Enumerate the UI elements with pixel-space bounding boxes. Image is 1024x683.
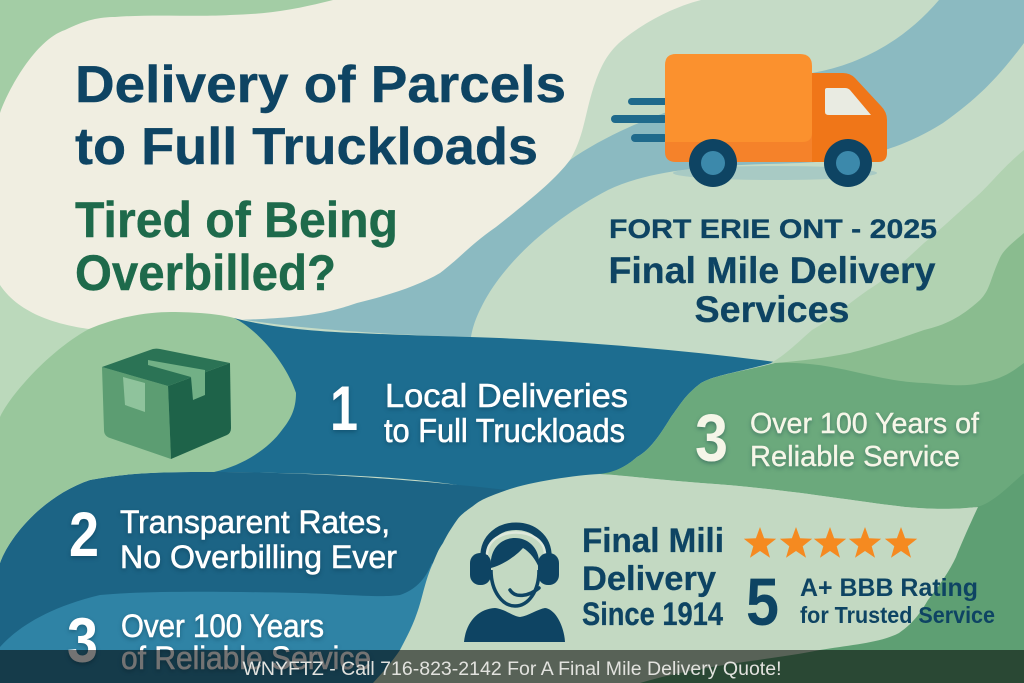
icon: five star rating (744, 527, 917, 558)
agent shoulders (464, 608, 565, 642)
final mile text: Since 1914 (582, 596, 723, 632)
background wave: green item blob (596, 363, 1024, 509)
item 2 (69, 500, 397, 575)
item 1: to Full Truckloads (384, 412, 625, 449)
subtitle: Overbilled? (75, 245, 336, 301)
final mile text: Delivery (582, 560, 716, 598)
background wave: support panel (373, 474, 978, 683)
title: to Full Truckloads (75, 118, 538, 176)
item 2: Transparent Rates, (120, 504, 390, 540)
box left face (102, 367, 171, 459)
item 1: Local Deliveries (385, 377, 628, 414)
background wave: teal band two (0, 472, 520, 683)
final mile text (582, 522, 724, 632)
item 1 (330, 374, 628, 449)
truck cab (800, 73, 887, 162)
final mile text: Final Mili (582, 522, 724, 560)
item 1: 1 (330, 374, 358, 444)
item 3 right (695, 401, 980, 476)
background wave: right pale green layer (771, 150, 1024, 363)
icon: support agent with headset (464, 526, 565, 642)
background wave: cream headline area (0, 0, 701, 329)
background wave: teal band one (214, 318, 775, 500)
headset highlight (487, 532, 545, 555)
box tape front (123, 377, 145, 412)
rating text: A+ BBB Rating (800, 574, 978, 602)
truck cargo box (665, 54, 812, 142)
rating text: for Trusted Service (800, 602, 995, 628)
title: Delivery of Parcels (75, 56, 566, 114)
ground shadow (673, 166, 877, 180)
background wave: top left green (0, 0, 340, 130)
truck window (825, 88, 871, 115)
microphone boom (510, 588, 539, 595)
item 3 right: Over 100 Years of (750, 408, 980, 440)
icon: delivery truck (611, 54, 887, 187)
background wave: bottom right dark green (500, 473, 1024, 683)
item 3 left: 3 (67, 606, 98, 676)
ear cups (470, 553, 491, 585)
speed lines (611, 98, 668, 142)
footer bar (0, 650, 1024, 683)
item 3 right: Reliable Service (750, 441, 960, 473)
background wave: teal band three (0, 563, 470, 683)
box right face (168, 363, 231, 459)
heading: final mile delivery services (608, 250, 936, 330)
rating number: 5 (746, 565, 779, 640)
item 2: No Overbilling Ever (120, 539, 397, 575)
item 3 left (67, 606, 371, 676)
title (75, 56, 566, 176)
background wave: left green bubble (0, 312, 296, 563)
background wave: left pale green (0, 250, 120, 450)
face outline (491, 570, 539, 606)
background wave: right mid green layer (775, 233, 1024, 400)
rating text (800, 574, 995, 628)
truck lower body (665, 130, 812, 162)
background wave: upper right blue band (234, 0, 1024, 337)
truck wheels (689, 139, 872, 187)
item 3 right: 3 (695, 401, 728, 476)
heading: final mile delivery services: Services (694, 289, 850, 330)
item 3 left: Over 100 Years (121, 608, 324, 644)
item 3 left: of Reliable Service (121, 640, 371, 676)
heading: final mile delivery services: Final Mile Delivery (608, 250, 936, 291)
item 2: 2 (69, 500, 99, 570)
box tape (148, 360, 205, 400)
location line: FORT ERIE ONT - 2025 (609, 214, 937, 244)
hair (491, 538, 539, 568)
icon: parcel box (102, 349, 231, 459)
box top face (102, 349, 230, 386)
headset band (484, 526, 548, 557)
footer text: WNYFTZ - Call 716-823-2142 For A Final Mile Delivery Quote! (242, 659, 782, 680)
subtitle: Tired of Being (75, 192, 398, 248)
subtitle (75, 192, 398, 301)
